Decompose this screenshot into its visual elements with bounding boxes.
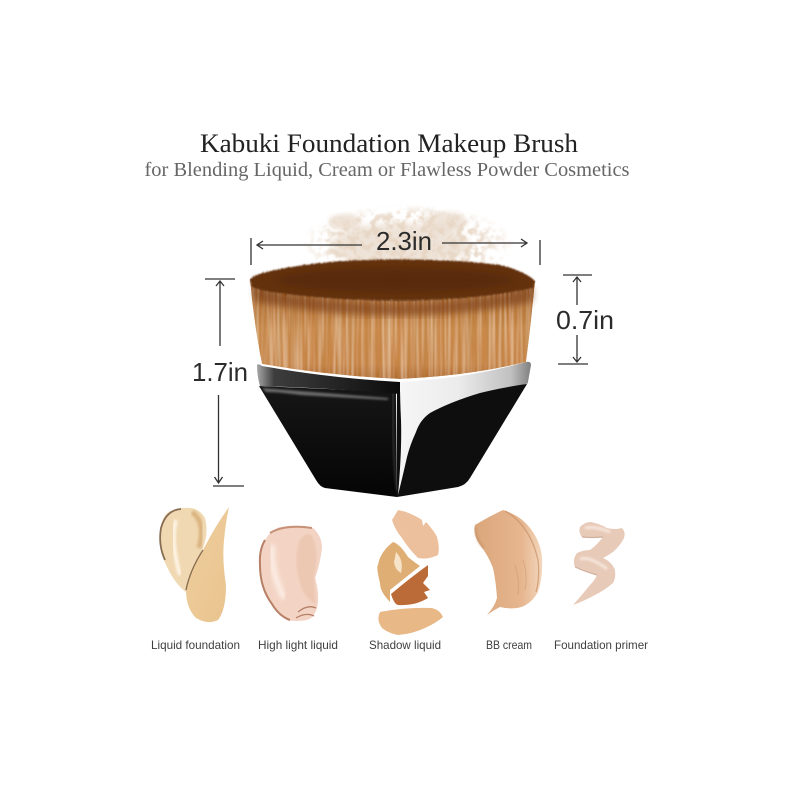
- label: bb cream: BB cream: [486, 638, 532, 652]
- swatch: bb cream: [475, 510, 542, 615]
- swatch: foundation primer: [573, 522, 625, 605]
- dimension: height 1.7in: 1.7in: [192, 357, 248, 387]
- brush handle: collar left: [257, 364, 400, 394]
- subtitle: for Blending Liquid, Cream or Flawless Powder Cosmetics: [144, 160, 630, 181]
- swatch: liquid foundation: [160, 507, 229, 622]
- label: shadow liquid: Shadow liquid: [369, 638, 441, 652]
- bristle top face: [250, 259, 535, 301]
- label: high light liquid: High light liquid: [258, 638, 338, 652]
- swatch: high light liquid: [260, 526, 322, 621]
- swatch: shadow liquid: [377, 510, 443, 635]
- dimension: height 1.7in: [192, 279, 248, 486]
- brush: [250, 259, 535, 497]
- bristle shading under top face: [254, 288, 533, 316]
- dimension: bristle height 0.7in: [556, 275, 614, 364]
- title: Kabuki Foundation Makeup Brush: [200, 129, 578, 158]
- dimension: width 2.3in: 2.3in: [376, 226, 432, 256]
- brush handle: silver highlight: [398, 362, 531, 495]
- brush bristles: [250, 259, 535, 379]
- label: liquid foundation: Liquid foundation: [151, 638, 240, 652]
- label: foundation primer: Foundation primer: [554, 638, 648, 652]
- brush handle: black base: [257, 362, 531, 497]
- dimension: width 2.3in: [251, 226, 540, 265]
- dimension: bristle height 0.7in: 0.7in: [556, 305, 614, 335]
- powder cloud: [300, 188, 515, 268]
